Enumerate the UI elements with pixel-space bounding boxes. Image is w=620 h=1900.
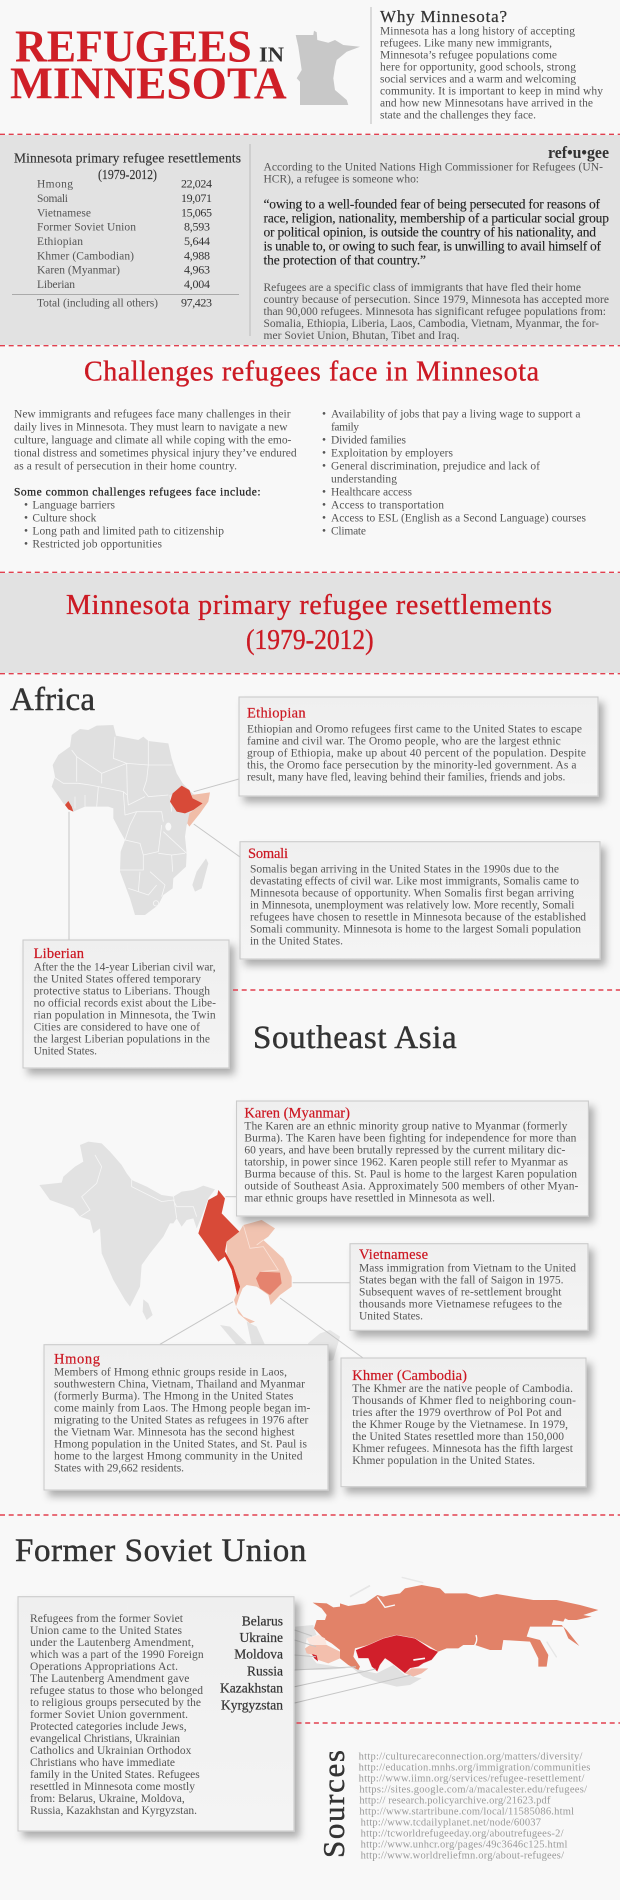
text block: challenges list continued: • bbox=[322, 409, 326, 421]
resettlement table: Total (including all others) bbox=[37, 298, 158, 310]
text block: challenges intro and list: Some common challenges refugees face include: bbox=[14, 487, 261, 499]
panel: Karen: Burma because of this. St. Paul is home to the largest Karen population bbox=[244, 1169, 577, 1181]
resettlement table: 19,071 bbox=[181, 191, 212, 205]
resettlement table: Somali bbox=[37, 193, 68, 205]
text block: source links: https://sites.google.com/a/macalester.edu/refugees/ bbox=[359, 1784, 587, 1795]
panel: Somali bbox=[240, 842, 600, 959]
panel: Khmer: tries after the 1979 overthrow of Pol Pot and bbox=[352, 1407, 562, 1419]
text block: challenges list continued: Divided families bbox=[331, 435, 407, 447]
text block: refugee definition: than 90,000 refugees. Minnesota has significant refugee populations from: bbox=[264, 306, 606, 318]
panel: Somali: Somali bbox=[248, 846, 288, 862]
text block: challenges intro and list: daily lives in Minnesota. They must learn to navigate a new bbox=[14, 422, 288, 434]
panel: former Soviet Union text: Union came to the United States bbox=[30, 1625, 183, 1637]
text block: challenges intro and list: • bbox=[24, 500, 28, 512]
resettlement table: Khmer (Cambodian) bbox=[37, 250, 134, 262]
panel: Ethiopian: Ethiopian bbox=[247, 706, 306, 722]
panel: Khmer: The Khmer are the native people of Cambodia. bbox=[352, 1383, 573, 1395]
text block: challenges intro and list: tional distress and sometimes physical injury they’ve endured bbox=[14, 448, 297, 460]
panel: Liberian bbox=[23, 940, 229, 1068]
panel: former Soviet Union text: Russia, Kazakhstan and Kyrgyzstan. bbox=[30, 1805, 197, 1817]
text block: source links: http:// research.policyarchive.org/21623.pdf bbox=[359, 1795, 551, 1806]
panel: Liberian: After the the 14-year Liberian civil war, bbox=[34, 962, 216, 974]
panel: Hmong: home to the largest Hmong community in the United bbox=[54, 1450, 303, 1462]
map: former Soviet Union bbox=[295, 1577, 598, 1687]
panel: Khmer: Thousands of Khmer fled to neighboring coun- bbox=[352, 1395, 576, 1407]
text block: challenges list continued: understanding bbox=[331, 474, 397, 486]
panel: Hmong: Hmong population in the United States, and St. Paul is bbox=[54, 1438, 308, 1450]
text block: challenges intro and list: Culture shock bbox=[32, 513, 97, 525]
surrounding countries bbox=[295, 1625, 347, 1670]
text block: source links: http://www.tcdailyplanet.net/node/60037 bbox=[361, 1817, 541, 1828]
panel: Hmong: States with 29,662 residents. bbox=[54, 1462, 184, 1474]
panel: primary resettlements banner bbox=[0, 572, 620, 674]
panel: resettlement table and definition band bbox=[0, 135, 620, 345]
panel: Liberian: Liberian bbox=[34, 946, 85, 962]
panel: Ethiopian: Ethiopian and Oromo refugees first came to the United States to escape bbox=[247, 724, 582, 736]
text block: why Minnesota: community. It is important to keep in mind why bbox=[380, 85, 603, 97]
text block: challenges intro and list: • bbox=[24, 539, 28, 551]
panel: Ethiopian: this, the Oromo face persecution by the minority-led government. As a bbox=[247, 760, 576, 772]
Kyrgyzstan bbox=[405, 1668, 428, 1677]
panel: former Soviet Union text bbox=[18, 1597, 294, 1831]
panel: Ethiopian: famine and civil war. The Oromo people, who are the largest ethnic bbox=[247, 736, 561, 748]
panel: former Soviet Union text: family in the United States. Refugees bbox=[30, 1769, 200, 1781]
resettlement table: (1979-2012) bbox=[98, 167, 157, 182]
Kazakhstan bbox=[356, 1635, 438, 1673]
South Asia bbox=[39, 1142, 215, 1307]
text block: source links: http://www.iimn.org/services/refugee-resettlement/ bbox=[359, 1773, 584, 1784]
text block: refugee definition: Refugees are a specific class of immigrants that have fled their home bbox=[264, 282, 581, 294]
resettlement table: 8,593 bbox=[184, 220, 210, 234]
country list: Russia bbox=[247, 1664, 283, 1679]
panel: Liberian: protective status to Liberians. Though bbox=[34, 986, 210, 998]
text block: challenges list continued: General discrimination, prejudice and lack of bbox=[331, 461, 540, 473]
text block: challenges list continued: • bbox=[322, 500, 326, 512]
panel: Karen: Karen (Myanmar) bbox=[244, 1105, 350, 1121]
resettlement table bbox=[12, 150, 241, 310]
panel: Vietnamese bbox=[350, 1244, 588, 1330]
panel: Karen: The Karen are an ethnic minority group native to Myanmar (formerly bbox=[244, 1121, 568, 1133]
resettlement table: 97,423 bbox=[181, 296, 212, 310]
panel: Hmong: southwestern China, Vietnam, Thailand and Myanmar bbox=[54, 1378, 305, 1390]
panel: Ethiopian bbox=[239, 697, 598, 796]
text block: challenges list continued: Exploitation by employers bbox=[331, 448, 454, 460]
icon: Minnesota map bbox=[296, 31, 360, 105]
text block: challenges intro and list: • bbox=[24, 526, 28, 538]
resettlement table: 22,024 bbox=[181, 177, 212, 191]
text block: why Minnesota: state and the challenges they face. bbox=[380, 109, 536, 121]
panel: former Soviet Union text: Catholics and Ukrainian Orthodox bbox=[30, 1745, 192, 1757]
arrow: Hmong leader bbox=[160, 1302, 233, 1344]
Indonesia and Malaysia bbox=[220, 1325, 247, 1345]
panel: former Soviet Union text: to religious groups persecuted by the bbox=[30, 1697, 201, 1709]
panel: Khmer: Khmer (Cambodia) bbox=[352, 1368, 467, 1384]
arrow: Somali leader bbox=[194, 824, 240, 857]
resettlement table: 4,004 bbox=[184, 277, 210, 291]
text block: why Minnesota: here for opportunity, good schools, strong bbox=[380, 61, 576, 73]
header title bbox=[10, 22, 287, 108]
Ethiopia bbox=[170, 786, 203, 813]
panel: former Soviet Union text: evangelical Christians, Ukrainian bbox=[30, 1733, 180, 1745]
text block: source links: http://tcworldrefugeeday.org/aboutrefugees-2/ bbox=[361, 1828, 564, 1839]
text block: why Minnesota: refugees. Like many new immigrants, bbox=[380, 37, 552, 49]
heading: challenges: Challenges refugees face in Minnesota bbox=[84, 357, 540, 388]
panel: primary resettlements banner: Minnesota primary refugee resettlements bbox=[66, 590, 552, 621]
Belarus bbox=[307, 1635, 327, 1645]
arrow: Khmer leader bbox=[280, 1298, 363, 1358]
text block: source links bbox=[359, 1751, 590, 1861]
text block: why Minnesota: Minnesota’s refugee populations come bbox=[380, 49, 557, 61]
arrow: Vietnamese leader bbox=[293, 1282, 350, 1284]
panel: Vietnamese: Mass immigration from Vietnam to the United bbox=[359, 1262, 576, 1274]
panel: Hmong: migrating to the United States as refugees in 1976 after bbox=[54, 1414, 309, 1426]
panel: Liberian: Cities are considered to have one of bbox=[34, 1022, 200, 1034]
text block: refugee definition: mer Soviet Union, Bhutan, Tibet and Iraq. bbox=[264, 330, 460, 342]
text block: refugee definition: or political opinion, is outside the country of his nationality, and bbox=[264, 224, 596, 239]
panel: Liberian: the United States offered temporary bbox=[34, 974, 201, 986]
text block: why Minnesota bbox=[380, 7, 603, 121]
text block: source links: http://www.worldreliefmn.org/about-refugees/ bbox=[361, 1850, 564, 1861]
panel: Somali: Somalis began arriving in the United States in the 1990s due to the bbox=[250, 864, 559, 876]
text block: challenges list continued bbox=[322, 409, 587, 538]
panel: former Soviet Union text: Operations Appropriations Act. bbox=[30, 1661, 178, 1673]
text block: challenges list continued: Healthcare access bbox=[331, 487, 413, 499]
panel: former Soviet Union text: which was a part of the 1990 Foreign bbox=[30, 1649, 204, 1661]
country list: Kyrgyzstan bbox=[221, 1697, 283, 1712]
map: Africa bbox=[52, 725, 210, 915]
text block: source links: http://culturecareconnection.org/matters/diversity/ bbox=[359, 1751, 582, 1762]
panel: Liberian: the largest Liberian populations in the bbox=[34, 1034, 210, 1046]
resettlement table: 5,644 bbox=[184, 234, 210, 248]
panel: Somali: in Minnesota, unemployment was relatively low. More recently, Somali bbox=[250, 900, 574, 912]
text block: refugee definition: ref•u•gee bbox=[548, 143, 609, 162]
text block: source links: http://www.unhcr.org/pages/49c3646c125.html bbox=[361, 1839, 567, 1850]
resettlement table: Ethiopian bbox=[37, 236, 83, 248]
Cambodia bbox=[256, 1272, 282, 1295]
map: Southeast Asia bbox=[39, 1142, 340, 1363]
panel: Hmong: the Vietnam War. Minnesota has the second highest bbox=[54, 1426, 295, 1438]
panel: Liberian: United States. bbox=[34, 1046, 97, 1058]
text block: challenges intro and list bbox=[14, 408, 297, 551]
panel: Somali: in the United States. bbox=[250, 936, 343, 948]
text block: refugee definition bbox=[264, 143, 609, 342]
panel: Somali: devastating effects of civil war. Like most immigrants, Somalis came to bbox=[250, 876, 579, 888]
panel: Hmong: come mainly from Laos. The Hmong people began im- bbox=[54, 1402, 311, 1414]
text block: challenges list continued: Access to ESL (English as a Second Language) courses bbox=[331, 513, 587, 525]
country list: Kazakhstan bbox=[220, 1681, 283, 1696]
Myanmar bbox=[198, 1190, 240, 1295]
panel: Karen: tatorship, in power since 1962. Karen people still refer to Myanmar as bbox=[244, 1157, 569, 1169]
panel: Somali: Minnesota because of opportunity. When Somalis first began arriving bbox=[250, 888, 574, 900]
panel: primary resettlements banner: (1979-2012) bbox=[246, 625, 374, 656]
panel: former Soviet Union text: Protected categories include Jews, bbox=[30, 1721, 187, 1733]
text block: refugee definition: HCR), a refugee is someone who: bbox=[264, 174, 419, 186]
header title: MINNESOTA bbox=[10, 58, 287, 108]
text block: refugee definition: is unable to, or owing to such fear, is unwilling to avail himself of bbox=[264, 238, 602, 253]
text block: challenges intro and list: culture, language and climate all while coping with the emo- bbox=[14, 434, 292, 446]
panel: former Soviet Union text: refugee status to those who belonged bbox=[30, 1685, 203, 1697]
text block: challenges list continued: Climate bbox=[331, 526, 366, 538]
panel: Khmer: Khmer refugees. Minnesota has the fifth largest bbox=[352, 1443, 574, 1455]
text block: challenges intro and list: Long path and limited path to citizenship bbox=[32, 526, 224, 538]
panel: Karen: mar ethnic groups have resettled in Minnesota as well. bbox=[244, 1193, 495, 1205]
panel: former Soviet Union text: Refugees from the former Soviet bbox=[30, 1613, 184, 1625]
panel: former Soviet Union text: The Lautenberg Amendment gave bbox=[30, 1673, 189, 1685]
panel: Karen: outside of Southeast Asia. Approximately 500 members of other Myan- bbox=[244, 1181, 579, 1193]
resettlement table: Vietnamese bbox=[37, 207, 91, 219]
text block: refugee definition: “owing to a well-founded fear of being persecuted for reasons of bbox=[264, 196, 600, 211]
header title: REFUGEES bbox=[15, 22, 252, 72]
text block: challenges list continued: • bbox=[322, 435, 326, 447]
resettlement table: Former Soviet Union bbox=[37, 222, 136, 234]
Thailand, Laos and Vietnam bbox=[227, 1220, 292, 1323]
text block: challenges list continued: • bbox=[322, 461, 326, 473]
panel: Liberian: rian population in Minnesota, the Twin bbox=[34, 1010, 216, 1022]
panel: Ethiopian: group of Ethiopia, make up about 40 percent of the population. Despite bbox=[247, 748, 586, 760]
arrow: Liberian leader bbox=[68, 812, 70, 940]
text block: challenges intro and list: • bbox=[24, 513, 28, 525]
resettlement table: Hmong bbox=[37, 179, 73, 191]
text block: refugee definition: the protection of that country.” bbox=[264, 252, 426, 267]
panel: Hmong bbox=[44, 1345, 328, 1490]
text block: refugee definition: country because of persecution. Since 1979, Minnesota has accepted more bbox=[264, 294, 609, 306]
resettlement table: Minnesota primary refugee resettlements bbox=[14, 150, 241, 166]
text block: challenges list continued: Access to transportation bbox=[331, 500, 444, 512]
panel: Vietnamese: Vietnamese bbox=[359, 1247, 428, 1263]
arrow: Ethiopian leader bbox=[194, 779, 239, 792]
text block: why Minnesota: Minnesota has a long history of accepting bbox=[380, 25, 575, 37]
panel: Ethiopian: result, many have fled, leaving behind their families, friends and jobs. bbox=[247, 772, 566, 784]
header title: IN bbox=[259, 43, 284, 67]
text block: challenges list continued: • bbox=[322, 448, 326, 460]
panel: Vietnamese: thousands more Vietnamese refugees to the bbox=[359, 1298, 562, 1310]
text block: challenges intro and list: as a result of persecution in their home country. bbox=[14, 460, 237, 472]
text block: challenges intro and list: New immigrants and refugees face many challenges in their bbox=[14, 408, 291, 420]
text block: why Minnesota: social services and a warm and welcoming bbox=[380, 73, 576, 85]
panel: former Soviet Union text: from: Belarus, Ukraine, Moldova, bbox=[30, 1793, 185, 1805]
panel: Hmong: (formerly Burma). The Hmong in the United States bbox=[54, 1390, 294, 1402]
panel: Karen: 60 years, and have been brutally repressed by the current military dic- bbox=[244, 1145, 566, 1157]
text block: why Minnesota: Why Minnesota? bbox=[380, 7, 507, 26]
country list bbox=[220, 1613, 283, 1712]
heading: Africa: Africa bbox=[10, 682, 95, 718]
text block: challenges list continued: • bbox=[322, 513, 326, 525]
text block: challenges list continued: • bbox=[322, 526, 326, 538]
heading: Southeast Asia: Southeast Asia bbox=[253, 1020, 457, 1056]
panel: former Soviet Union text: former Soviet Union government. bbox=[30, 1709, 188, 1721]
panel: Somali: refugees have chosen to resettle in Minnesota because of the established bbox=[250, 912, 586, 924]
heading: sources: Sources bbox=[316, 1750, 351, 1858]
Moldova bbox=[312, 1654, 318, 1661]
resettlement table: 4,963 bbox=[184, 263, 210, 277]
text block: challenges intro and list: Language barriers bbox=[32, 500, 116, 512]
heading: Former Soviet Union: Former Soviet Union bbox=[15, 1533, 306, 1569]
text block: refugee definition: According to the United Nations High Commissioner for Refugees (UN- bbox=[264, 162, 603, 174]
panel: Karen: Burma). The Karen have been fighting for independence for more than bbox=[244, 1133, 577, 1145]
panel: former Soviet Union text: resettled in Minnesota come mostly bbox=[30, 1781, 195, 1793]
panel: Vietnamese: States began with the fall of Saigon in 1975. bbox=[359, 1274, 564, 1286]
panel: Karen bbox=[236, 1101, 588, 1216]
text block: challenges list continued: Availability of jobs that pay a living wage to support a bbox=[331, 409, 580, 421]
text block: challenges intro and list: Restricted job opportunities bbox=[32, 539, 163, 551]
panel: Somali: Somali community. Minnesota is home to the largest Somali population bbox=[250, 924, 581, 936]
Russia bbox=[313, 1585, 598, 1670]
panel: Hmong: Hmong bbox=[54, 1351, 100, 1367]
panel: Khmer: Khmer population in the United States. bbox=[352, 1455, 535, 1467]
panel: Vietnamese: Subsequent waves of re-settlement brought bbox=[359, 1286, 562, 1298]
resettlement table: Karen (Myanmar) bbox=[37, 265, 120, 277]
Liberia bbox=[65, 801, 73, 812]
panel: former Soviet Union text: Christians who have immediate bbox=[30, 1757, 175, 1769]
country list: Belarus bbox=[242, 1613, 283, 1628]
text block: why Minnesota: and how new Minnesotans have arrived in the bbox=[380, 97, 593, 109]
panel: Khmer: the Khmer Rouge by the Vietnamese. In 1979, bbox=[352, 1419, 568, 1431]
resettlement table: 4,988 bbox=[184, 248, 210, 262]
text block: challenges list continued: family bbox=[331, 422, 359, 434]
panel: Khmer: the United States resettled more than 150,000 bbox=[352, 1431, 564, 1443]
panel: Vietnamese: United States. bbox=[359, 1310, 423, 1322]
country list: Ukraine bbox=[240, 1630, 283, 1645]
country list: Moldova bbox=[234, 1647, 283, 1662]
text block: source links: http://education.mnhs.org/immigration/communities bbox=[359, 1762, 590, 1773]
arrow: Karen leader bbox=[225, 1196, 236, 1198]
resettlement table: Liberian bbox=[37, 279, 75, 291]
panel: former Soviet Union text: under the Lautenberg Amendment, bbox=[30, 1637, 194, 1649]
resettlement table: 15,065 bbox=[181, 205, 212, 219]
text block: refugee definition: Somalia, Ethiopia, Liberia, Laos, Cambodia, Vietnam, Myanmar, the for- bbox=[264, 318, 599, 330]
arrow: country leaders bbox=[295, 1630, 411, 1703]
Ukraine bbox=[305, 1645, 340, 1663]
Somalia bbox=[187, 792, 210, 827]
panel: Liberian: no official records exist about the Libe- bbox=[34, 998, 216, 1010]
text block: challenges list continued: • bbox=[322, 487, 326, 499]
panel: Hmong: Members of Hmong ethnic groups reside in Laos, bbox=[54, 1366, 287, 1378]
text block: refugee definition: race, religion, nationality, membership of a particular social group bbox=[264, 210, 609, 225]
text block: source links: http://www.startribune.com/local/11585086.html bbox=[359, 1806, 574, 1817]
panel: Khmer bbox=[341, 1358, 586, 1487]
